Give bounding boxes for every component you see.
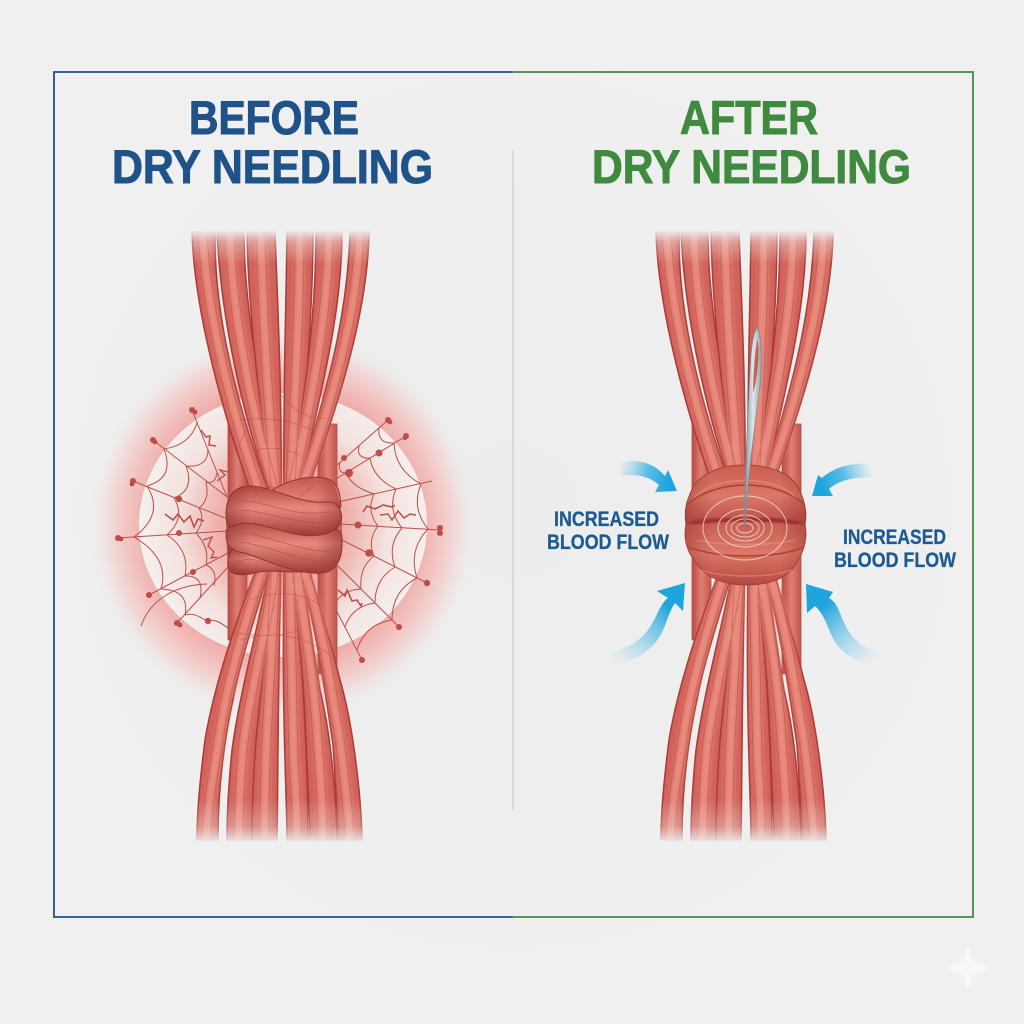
knot: lower left lobe [228, 545, 318, 575]
knot: upper band [226, 486, 342, 536]
heading: after dry needling: DRY NEEDLING [592, 140, 911, 193]
knot: rear upper lobe [270, 477, 341, 512]
muscle knot [226, 477, 342, 575]
frame: after side [513, 72, 973, 917]
heading: after dry needling [592, 91, 911, 193]
knot: upper half [685, 465, 806, 527]
nerve knots: web clusters [115, 407, 443, 663]
heading: after dry needling: AFTER [680, 91, 818, 144]
arrow: lower right blood flow [806, 584, 878, 665]
arrow: lower left blood flow [612, 583, 685, 664]
white pain disc [139, 393, 427, 657]
label: increased blood flow right: BLOOD FLOW [834, 549, 956, 572]
knot: fibers [234, 478, 335, 565]
heading: before dry needling: DRY NEEDLING [112, 140, 433, 193]
sparkle watermark [943, 943, 993, 993]
nerve web: left [118, 410, 232, 632]
knot: middle band [226, 520, 342, 573]
arrow: upper left blood flow [620, 461, 677, 492]
frame: before side [54, 72, 513, 917]
knot: lower half [685, 521, 806, 585]
muscle strands: before [192, 232, 369, 840]
web threads over muscle [232, 395, 330, 655]
red inflammation glow [87, 329, 479, 721]
knot: band folds and fibers [687, 480, 805, 576]
label: increased blood flow left: BLOOD FLOW [547, 531, 669, 554]
label: increased blood flow left [547, 508, 669, 554]
knot: side shading [685, 465, 806, 585]
label: increased blood flow left: INCREASED [554, 508, 659, 531]
label: increased blood flow right [834, 526, 956, 572]
panel: before illustration [87, 232, 479, 840]
treatment ripple rings [703, 496, 787, 560]
heading: before dry needling [112, 91, 433, 193]
knot: side shading [226, 478, 342, 575]
icon: needle [745, 328, 761, 527]
panel: after illustration [547, 232, 956, 840]
label: increased blood flow right: INCREASED [843, 526, 946, 549]
released muscle knot [685, 465, 806, 585]
nerve web: right [310, 420, 440, 660]
muscle strands: after [656, 232, 833, 840]
arrow: upper right blood flow [812, 464, 872, 496]
knot: backing silhouette [685, 465, 806, 585]
heading: before dry needling: BEFORE [189, 91, 359, 144]
